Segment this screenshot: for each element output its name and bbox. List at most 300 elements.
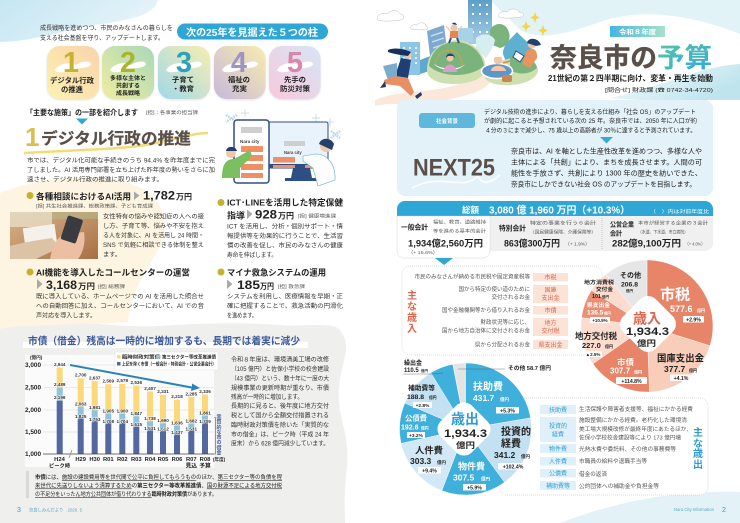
public enterprise account: 本市が経営する企業の３会計 xyxy=(638,220,709,226)
local consumption tax: 101 xyxy=(592,294,601,300)
chart explanation text: 来世代に先送りしないよう清算するための第三セクター等改革推進債、国の財源不足による地方交付税 xyxy=(35,482,282,490)
other expenditure xyxy=(458,364,552,372)
value labels: 1,709 xyxy=(199,419,211,424)
social background text xyxy=(484,108,697,134)
badge: social background xyxy=(419,113,475,128)
measure: ICT LINE health guidance: 報提供等を効果的に行うことで、生活習 xyxy=(227,232,343,240)
intro text xyxy=(40,24,173,42)
measure: Myna emergency system: [担] 救急課 xyxy=(278,283,305,290)
special account: （+ 1.9%） xyxy=(565,242,590,248)
main revenue label: な xyxy=(407,301,417,313)
measure: ICT LINE health guidance: ICT を活用し、分析・個別サポート・情 xyxy=(227,222,343,230)
illustration: city, hills, people xyxy=(375,0,548,110)
goods: 物件費 xyxy=(458,460,485,472)
revenue row: national subsidy xyxy=(458,285,568,303)
revenue row: city tax: 市民のみなさんが納める市民税や固定資産税等 xyxy=(414,272,530,280)
city tax: 577.6 xyxy=(670,304,693,314)
total amount xyxy=(462,204,709,216)
subsidies: +2.8% xyxy=(416,403,430,409)
centre label: 歳入 xyxy=(633,310,661,326)
heading pill: five pillars xyxy=(177,24,328,40)
expenditure row: goods: 光熱水費や委託料、その他の事務費等 xyxy=(579,445,677,453)
text: AI consultation: る人を対象に、AI を活用し 24 時間・ xyxy=(103,232,204,240)
social assistance: 扶助費 xyxy=(473,380,503,393)
illustration: tablet and monitor with two people xyxy=(222,109,340,186)
chart explanation text: 市債には、施設の建設費用等を世代間で公平に負担してもらうもののほか、第三セクター等の負債を程 xyxy=(35,473,282,481)
card 5: disaster prevention xyxy=(269,46,320,99)
background: bottom-right wave xyxy=(560,492,740,523)
background: top-left blue wave xyxy=(0,0,158,42)
special account: 特定の事業を行う６会計 xyxy=(530,220,597,226)
national subsidy: 377.7 xyxy=(664,364,686,374)
prefectural subsidy: 億円 xyxy=(604,310,612,316)
debt explanation text: 長期的に見ると、後年度に地方交付 xyxy=(231,402,329,410)
value labels: 1,531 xyxy=(186,426,197,432)
social assistance: 431.7 xyxy=(473,393,495,403)
value labels: 1,825 xyxy=(75,414,87,419)
expenditure row: goods: 物件費 xyxy=(549,445,567,453)
bar chart: debt balance xyxy=(25,352,226,470)
left island xyxy=(427,40,486,84)
measure: AI for consultations: 1,782 xyxy=(143,188,175,202)
local allocation tax xyxy=(575,331,618,357)
debt explanation text: 規模事業の更新時期が重なり、市債 xyxy=(231,384,329,392)
total amount: 3,080 億 1,960 万円（+10.3%） xyxy=(489,204,630,216)
child with orange shirt xyxy=(450,24,458,32)
intro text: 成長戦略を進めつつ、市民のみなさんの暮らしを xyxy=(40,24,173,32)
local consumption tax: 交付金 xyxy=(596,285,614,293)
general account: 等を進める基本的会計 xyxy=(433,228,487,234)
running woman xyxy=(404,52,412,58)
measure: AI call center: への自動回答に加え、コールセンターにおいて、AI での音 xyxy=(36,302,204,310)
value labels: 1,905 xyxy=(103,408,114,414)
contact: [問合せ] 財政課 (☎ 0742-34-4720) xyxy=(605,86,713,94)
public enterprise account: 282億9,100万円 xyxy=(612,238,681,248)
text: AI consultation xyxy=(103,212,204,258)
city tax: 億円 xyxy=(697,307,705,313)
measure: ICT LINE health guidance: 万円 xyxy=(278,212,294,220)
expenditure row: investment xyxy=(540,416,692,442)
expenditure row: personnel: 市職員の給料や退職手当等 xyxy=(579,457,647,465)
x axis labels: 予算 xyxy=(199,462,211,470)
centre label: 1,934.3 xyxy=(626,326,669,338)
legend xyxy=(115,352,218,370)
intro paragraph: 市では、デジタル化可能な手続きのうち 94.4% を昨年度までに完 xyxy=(27,156,215,164)
measure: ICT LINE health guidance: 928 xyxy=(255,208,277,222)
photo: woman using smartphone xyxy=(10,212,98,259)
measure: AI for consultations: [担] 共生社会推進課、総務政策課、子ども育成課 xyxy=(36,202,153,210)
goods xyxy=(453,460,490,492)
expenditure row: investment: 施設整備にかかる経費。老朽化した環境清 xyxy=(579,416,688,424)
city tax: +2.9% xyxy=(686,318,701,324)
footer right: 2 xyxy=(722,507,726,514)
centre label: 億円 xyxy=(637,338,656,348)
subsidies: 補助費等 xyxy=(408,383,436,392)
arrow down xyxy=(600,137,613,144)
expenditure row: personnel xyxy=(540,457,647,466)
value labels: 1,900 xyxy=(117,408,128,414)
NEXT25 text xyxy=(511,146,702,188)
centre label xyxy=(433,398,495,460)
city tax xyxy=(660,286,705,324)
value labels: 1,531 xyxy=(144,426,156,431)
peach ribbon xyxy=(375,72,492,110)
x axis labels: H30 xyxy=(89,457,100,463)
expenditure row: investment: 投資的 xyxy=(549,422,567,430)
other revenue: その他 xyxy=(620,270,641,280)
debt explanation text: 税として国から全額交付措置される xyxy=(231,412,329,420)
intro paragraph xyxy=(27,156,215,184)
other revenue: 億円 xyxy=(626,288,634,293)
measure: ICT LINE health guidance: 寿命を伸ばします。 xyxy=(227,251,277,259)
measure: AI call center: 既に導入している、ホームページでの AI を活用した照合せ xyxy=(36,292,204,300)
expenditure row: investment: 経費 xyxy=(552,430,564,438)
main revenue label: 入 xyxy=(407,323,417,335)
value labels: 2,285 xyxy=(186,392,197,396)
debt service: 公債費 xyxy=(405,414,427,422)
card 4: welfare: 福祉の xyxy=(228,75,250,84)
debt heading: 市債（借金）残高は一時的に増加するも、長期では着実に減少 xyxy=(28,334,301,348)
card 1: digital administration: 1 xyxy=(63,47,79,79)
x axis labels: R06 xyxy=(172,457,183,463)
value labels: 2,637 xyxy=(89,376,101,380)
intro paragraph: 了しました。AI 活用専門部署を立ち上げた昨年度の勢いをさらに加 xyxy=(27,166,215,174)
footer right xyxy=(674,507,726,514)
trend arrow xyxy=(70,364,200,391)
title: 奈良市の xyxy=(550,43,657,73)
revenue row: municipal bonds: 国や金融機関等から借り入れるお金 xyxy=(442,306,530,314)
panel: main expenditure xyxy=(500,398,708,495)
x axis labels xyxy=(49,456,226,470)
hot spring pool xyxy=(482,64,512,78)
expenditure row: social assistance: 扶助費 xyxy=(549,406,567,414)
subsidies: 億円 xyxy=(429,395,437,400)
revenue row: prefectural subsidy xyxy=(475,340,568,349)
illustration: tablet and monitor with two people: Nara city xyxy=(240,139,260,144)
x axis labels: (年度) xyxy=(213,456,226,463)
revenue row: national subsidy: 交付されるお金 xyxy=(491,293,530,301)
title xyxy=(550,43,712,73)
personnel: 億円 xyxy=(437,459,446,466)
card 1: digital administration: の推進 xyxy=(61,85,83,94)
card 1: digital administration xyxy=(47,46,99,99)
debt explanation text: （105 億円）と佐保小学校の校舎建設 xyxy=(231,365,329,373)
value labels: 2,569 xyxy=(103,378,114,384)
personnel: 303.3 xyxy=(410,456,432,466)
other expenditure: その他 58.7 億円 xyxy=(508,364,552,372)
public enterprise account: 公営企業 xyxy=(610,220,635,228)
value labels: 1,437 xyxy=(171,430,183,435)
general account: 一般会計 xyxy=(401,222,428,232)
debt explanation text: （43 億円）という、数十年に一度の大 xyxy=(231,374,329,382)
prefectural subsidy xyxy=(587,301,612,323)
measure: AI call center: 万円 xyxy=(78,282,95,291)
investment: +102.4% xyxy=(503,464,524,470)
text: AI consultation: し方、子育て等、悩みや不安を抱え xyxy=(103,222,204,230)
debt explanation text xyxy=(231,356,329,448)
social background text: デジタル技術の進歩により、暮らしを支える仕組み「社会 OS」のアップデート xyxy=(484,108,696,116)
expenditure row: personnel: 人件費 xyxy=(549,458,567,466)
value labels: 1,981 xyxy=(89,405,101,410)
value labels: 1,738 xyxy=(144,416,156,421)
y axis labels: 1,500 xyxy=(25,429,41,436)
section title: digital administration: 1 xyxy=(25,122,39,152)
subtitle: 21世紀の第２四半期に向け、変革・再生を始動 xyxy=(548,73,713,83)
measure: ICT LINE health guidance: 慣の改善を促し、市民のみなさんの健康 xyxy=(227,242,343,250)
legend: 上記を除く市債（一般会計・特別会計・公営企業会計） xyxy=(122,360,216,368)
expenditure row: debt service: 借金の返済 xyxy=(579,470,607,478)
measure: Myna emergency system xyxy=(218,268,343,320)
five pillar cards xyxy=(47,46,320,99)
goods: 億円 xyxy=(481,476,490,482)
measure: Myna emergency system: 185 xyxy=(237,278,260,292)
personnel xyxy=(410,444,446,474)
expenditure row: subsidies xyxy=(540,481,660,490)
clouds xyxy=(377,9,524,30)
debt explanation text: 令和８年度は、環境清美工場の改修 xyxy=(231,356,329,364)
value labels: 2,578 xyxy=(117,378,128,383)
subsidies: 188.8 xyxy=(407,394,424,401)
badge: social background: 社会背景 xyxy=(436,117,458,125)
revenue row: national subsidy: 国から特定の使い道のために xyxy=(458,285,530,293)
national subsidy: 国庫支出金 xyxy=(657,352,704,364)
general account: 福祉、教育、道路維持 xyxy=(433,218,487,226)
card 2: co-creation growth: 2 xyxy=(120,47,136,79)
measure: Myna emergency system: 万円 xyxy=(260,282,274,291)
national subsidy: +4.1% xyxy=(674,376,689,382)
y axis labels: 2,500 xyxy=(25,384,41,392)
revenue row: city tax: 市税 xyxy=(544,274,557,282)
title: 予算 xyxy=(657,43,712,73)
general account: （+ 15.6%） xyxy=(408,250,438,256)
expenditure row: goods xyxy=(540,444,677,453)
measure: AI for consultations xyxy=(26,188,192,210)
debt explanation text: 度末）から 628 億円減少しています。 xyxy=(231,440,329,448)
total amount: （ ）内は対前年度比 xyxy=(650,208,709,215)
other revenue: 206.8 xyxy=(621,282,638,288)
debt service xyxy=(401,414,429,439)
card 3: childcare and education: ・教育 xyxy=(172,84,194,93)
value labels: 2,489 xyxy=(54,382,66,387)
local consumption tax: 億円 xyxy=(602,294,610,299)
public enterprise account: （水道、下水道、市立病院） xyxy=(638,228,688,236)
revenue row: local allocation tax xyxy=(442,318,568,336)
revenue row: local allocation tax: 地方 xyxy=(544,319,557,327)
revenue row: municipal bonds xyxy=(442,306,568,314)
card 3: childcare and education xyxy=(158,46,210,99)
measure: AI call center xyxy=(26,268,204,320)
special account: 863億300万円 xyxy=(504,238,560,248)
value labels: 1,636 xyxy=(171,420,183,426)
x axis labels: R08 xyxy=(200,457,211,463)
expenditure row: debt service: 公債費 xyxy=(549,470,567,478)
measure: AI call center: 声対応を導入します。 xyxy=(36,312,96,320)
main expenditure label: 出 xyxy=(693,458,703,471)
card 2: co-creation growth: 多様な主体と xyxy=(110,74,146,82)
background: grey wave behind debt section xyxy=(0,323,347,523)
card 5: disaster prevention: 5 xyxy=(287,47,303,79)
bars xyxy=(57,368,208,454)
measure: Myna emergency system: システムを利用し、医療情報を早期・正 xyxy=(227,292,343,300)
investment: 341.2 xyxy=(494,450,516,460)
chart explanation text: の不足分をいったん地方公共団体が借り代わりする臨時財政対策債があります。 xyxy=(35,490,217,498)
card 5: disaster prevention: 先手の xyxy=(284,75,306,84)
value labels: 1,690 xyxy=(157,418,169,423)
value labels xyxy=(54,362,211,435)
back trees and castle xyxy=(490,24,510,48)
NEXT25 text: 主体による「共創」により、まちを成長させます。人間の可 xyxy=(511,158,702,166)
municipal bonds: 市債 xyxy=(617,357,634,367)
y axis labels: 1,000 xyxy=(25,451,41,458)
debt explanation text: 臨時財政対策債を除いた「実質的な xyxy=(231,421,329,429)
prefectural subsidy: +10.5% xyxy=(592,318,608,323)
panel: main revenue xyxy=(402,266,602,355)
card 4: welfare: 充実 xyxy=(232,84,247,93)
NEXT25 text: 奈良市は、AI を軸とした生産性改革を進めつつ、多様な人や xyxy=(511,146,702,156)
municipal bonds: +114.8% xyxy=(621,379,642,385)
special account: 特別会計 xyxy=(499,224,526,232)
intro text: 支える社会基盤を守り、アップデートします。 xyxy=(40,34,164,42)
other revenue xyxy=(620,270,641,293)
bracket and real debt label: 実質的な市の借金 xyxy=(216,413,222,455)
legend: 臨時財政対策債 xyxy=(122,354,161,360)
subheading: main measures: 「主要な施策」の一部を紹介します xyxy=(26,107,138,117)
blue buildings xyxy=(400,42,420,75)
x axis labels: R04 xyxy=(145,457,156,463)
centre label: 歳出 xyxy=(451,411,479,427)
municipal bonds: 億円 xyxy=(634,368,642,374)
measure: AI call center: AI機能を導入したコールセンターの運営 xyxy=(36,268,190,278)
debt service: 192.6 xyxy=(401,424,419,432)
wedges xyxy=(399,363,532,495)
revenue row: local allocation tax: 交付税 xyxy=(541,327,560,335)
pie chart: expenditure xyxy=(399,359,552,495)
value labels: 2,196 xyxy=(54,395,66,400)
public enterprise account: 会計 xyxy=(610,228,623,238)
measure: AI for consultations: 万円 xyxy=(176,192,192,202)
illustration: tablet and monitor with two people: Nara city xyxy=(284,150,302,155)
value labels: 1,704 xyxy=(117,419,128,424)
gridlines xyxy=(43,365,214,432)
social background text: ４分の３にまで減少し、75 歳以上の高齢者が 30％に達すると予測されています。 xyxy=(485,126,696,134)
centre label xyxy=(615,291,681,357)
value labels: 2,063 xyxy=(75,402,87,406)
value labels: 1,861 xyxy=(199,410,211,416)
debt explanation text: 市の借金」は、ピーク時（平成 24 年 xyxy=(231,430,329,438)
main expenditure label: 主 xyxy=(693,426,703,439)
value labels: 1,708 xyxy=(103,419,114,424)
municipal bonds: 307.7 xyxy=(610,366,631,376)
text: AI consultation: SNS で気軽に相談できる体制を整え xyxy=(103,241,204,249)
footer left xyxy=(17,506,82,514)
revenue row: city tax xyxy=(414,272,568,282)
x axis labels: H24 xyxy=(54,457,66,463)
centre label: 1,934.3 xyxy=(444,428,487,440)
card 5: disaster prevention: 防災対策 xyxy=(280,84,310,93)
transfers: 110.5 xyxy=(404,368,419,374)
social background text: が劇的に起こると予想されている次の 25 年。奈良市では、2050 年に人口が約 xyxy=(484,117,697,125)
measure: ICT LINE health guidance: ICT･LINEを活用した特定保健 xyxy=(227,198,344,208)
local consumption tax: 地方消費税 xyxy=(584,278,615,286)
expenditure row: subsidies: 公的団体への補助金や負担金等 xyxy=(579,482,660,490)
main revenue label: 歳 xyxy=(407,311,417,324)
main revenue label xyxy=(407,289,417,335)
text: AI consultation: 女性特有の悩みや認知症の人への接 xyxy=(103,212,204,220)
break mark xyxy=(69,450,72,458)
goods: +5.9% xyxy=(467,486,482,492)
local allocation tax: 227.0 xyxy=(582,341,601,350)
NEXT25 logo: NEXT25 xyxy=(413,154,495,182)
measure: AI for consultations: 各種相談におけるAI活用 xyxy=(36,192,131,202)
value labels: 2,331 xyxy=(157,389,169,394)
subsidies xyxy=(407,383,437,409)
girl on swing xyxy=(435,50,463,66)
value labels: 1,615 xyxy=(131,422,142,427)
local consumption tax xyxy=(584,278,615,300)
background: yellow blob xyxy=(0,178,165,330)
x axis labels: H29 xyxy=(75,457,87,463)
revenue row: national subsidy: 国庫 xyxy=(544,286,557,294)
investment: 経費 xyxy=(501,437,521,450)
card 4: welfare xyxy=(214,46,266,99)
badge: Reiwa 8 xyxy=(610,26,665,37)
y axis labels xyxy=(25,354,43,458)
pie chart: revenue xyxy=(575,260,713,392)
prefectural subsidy: 136.5 xyxy=(587,310,604,316)
special account: （国民健康保険、介護保険等） xyxy=(530,228,596,236)
arrow down to revenue xyxy=(435,258,453,265)
debt explanation text: 残高が一時的に増加します。 xyxy=(231,393,303,401)
card 3: childcare and education: 子育て xyxy=(172,75,194,84)
expenditure row: subsidies: 補助費等 xyxy=(546,482,570,490)
text: AI consultation: ます。 xyxy=(103,252,121,258)
revenue row: prefectural subsidy: 県支出金 xyxy=(538,341,563,349)
value labels: 1,682 xyxy=(186,418,197,424)
axis xyxy=(43,453,214,455)
investment xyxy=(494,425,531,470)
main expenditure label: 歳 xyxy=(693,447,703,460)
chart explanation text xyxy=(26,471,282,498)
x axis labels: R05 xyxy=(158,457,169,463)
local allocation tax: 地方交付税 xyxy=(575,331,618,341)
investment: 億円 xyxy=(521,453,530,460)
general account: 1,934億2,560万円 xyxy=(408,238,483,248)
bather xyxy=(494,56,502,64)
value labels: 1,753 xyxy=(89,417,101,422)
social assistance: +5.3% xyxy=(500,408,515,414)
local allocation tax: 億円 xyxy=(605,343,613,349)
social assistance xyxy=(473,380,519,414)
measure: AI call center: 3,168 xyxy=(46,278,77,292)
y axis labels: 3,000 xyxy=(25,362,41,369)
city tax: 市税 xyxy=(660,286,690,304)
footer left: 3 xyxy=(17,507,21,514)
section title: digital administration xyxy=(24,122,208,153)
value labels: 2,700 xyxy=(75,372,87,378)
transfers xyxy=(403,359,443,374)
x axis labels: ピーク時 xyxy=(49,462,71,470)
x axis labels: R07 xyxy=(186,457,197,463)
national subsidy xyxy=(657,352,704,382)
card 2: co-creation growth: 成長戦略 xyxy=(116,89,140,97)
y axis labels: 2,000 xyxy=(25,407,41,414)
special account xyxy=(499,220,597,248)
personnel: 人件費 xyxy=(415,444,443,456)
measure: ICT LINE health guidance: 指導 xyxy=(227,210,246,220)
subheading: main measures: [担]：各事業の担当課 xyxy=(146,109,198,116)
NEXT25 text: 能性を手放さず、共創により 1300 年の歴史を紡いできた、 xyxy=(511,168,702,178)
value labels: 2,336 xyxy=(199,389,211,394)
